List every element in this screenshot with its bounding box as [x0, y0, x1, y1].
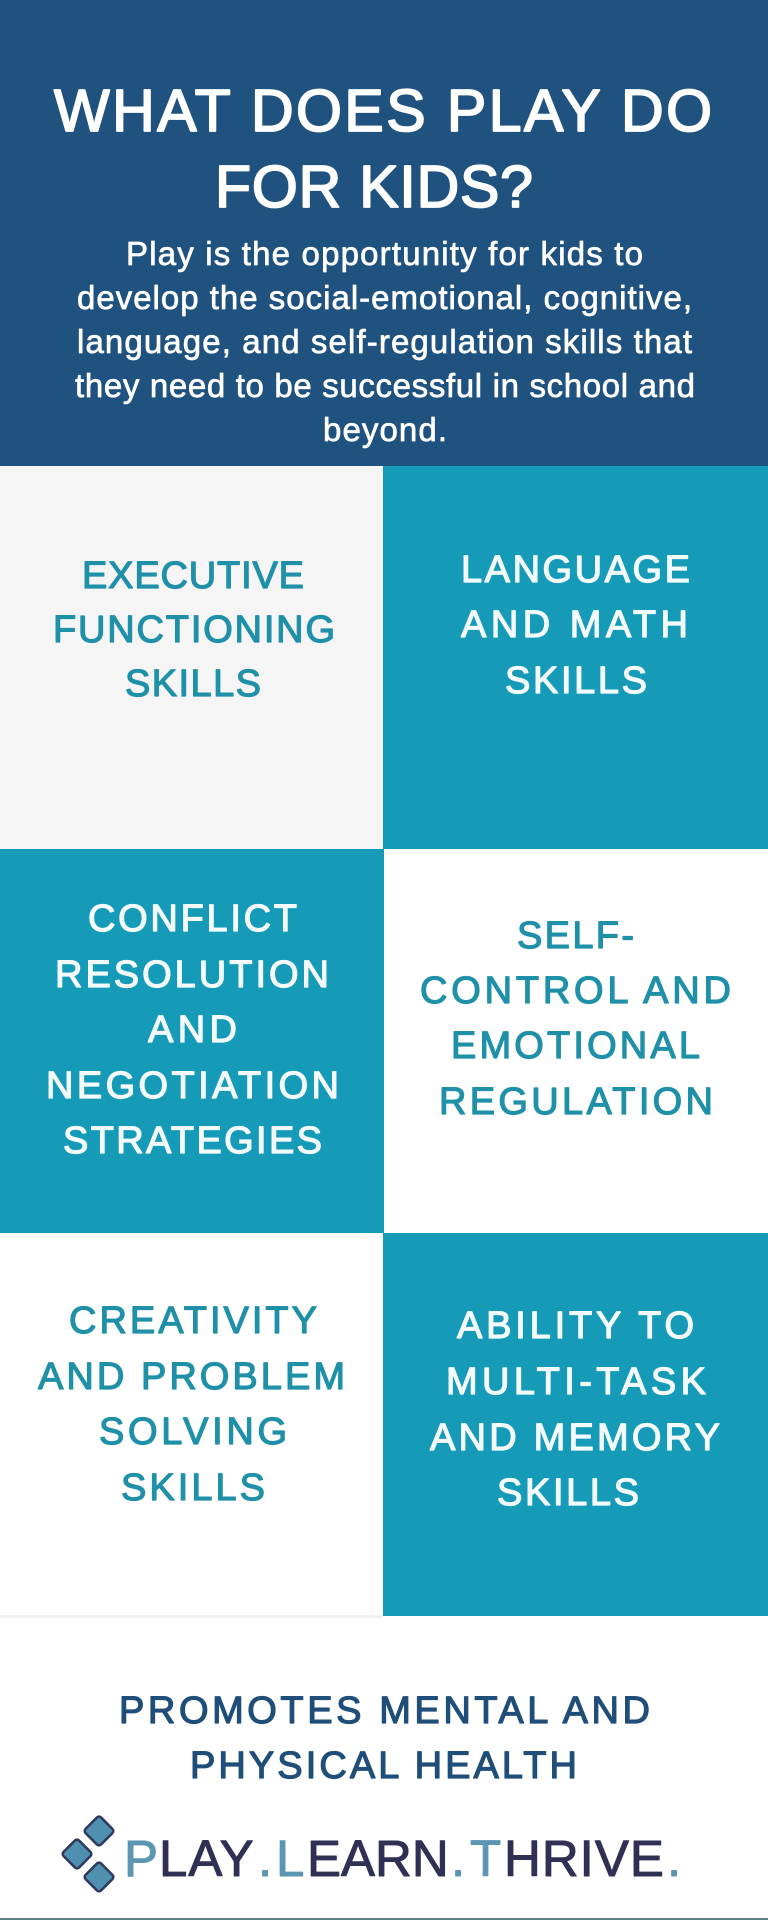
panel: ability to multi-task and memory skills [383, 1233, 768, 1616]
panel: header [0, 0, 768, 466]
intro text: develop the social-emotional, cognitive, [77, 279, 692, 316]
title: WHAT DOES PLAY DO [54, 78, 712, 144]
panel: creativity and problem solving skills [0, 1233, 383, 1616]
panel: executive functioning skills: FUNCTIONING [53, 609, 335, 651]
logo wordmark: LAY [159, 1830, 255, 1887]
icon: three diamonds [61, 1815, 115, 1893]
panel: self-control and emotional regulation: SELF- [517, 915, 634, 957]
intro text: beyond. [323, 411, 447, 448]
panel: ability to multi-task and memory skills: ABILITY TO [457, 1305, 694, 1347]
panel: ability to multi-task and memory skills: MULTI-TASK [446, 1361, 706, 1403]
logo wordmark: P [124, 1830, 158, 1887]
panel: conflict resolution and negotiation strategies: AND [148, 1009, 237, 1051]
panel: conflict resolution and negotiation strategies [0, 849, 384, 1233]
panel: conflict resolution and negotiation strategies: STRATEGIES [63, 1120, 322, 1162]
panel: language and math skills: LANGUAGE [461, 549, 690, 591]
logo wordmark: HRIVE [504, 1830, 665, 1887]
panel: executive functioning skills [0, 466, 383, 849]
panel: conflict resolution and negotiation strategies: NEGOTIATION [46, 1065, 339, 1107]
panel: creativity and problem solving skills: CREATIVITY [69, 1300, 317, 1342]
logo wordmark: L [276, 1830, 304, 1887]
panel: language and math skills [383, 466, 768, 849]
footer heading: PHYSICAL HEALTH [190, 1745, 577, 1787]
panel: conflict resolution and negotiation strategies: RESOLUTION [55, 954, 329, 996]
panel: creativity and problem solving skills: SKILLS [121, 1467, 265, 1509]
panel: self-control and emotional regulation: REGULATION [439, 1081, 713, 1123]
panel: self-control and emotional regulation: CONTROL AND [420, 970, 731, 1012]
panel: self-control and emotional regulation: EMOTIONAL [451, 1025, 700, 1067]
logo wordmark: . [258, 1830, 272, 1887]
panel: ability to multi-task and memory skills: AND MEMORY [430, 1417, 720, 1459]
title: FOR KIDS? [215, 154, 533, 220]
logo wordmark: EARN [307, 1830, 449, 1887]
panel: language and math skills: SKILLS [505, 660, 647, 702]
panel: creativity and problem solving skills: AND PROBLEM [38, 1356, 345, 1398]
panel: self-control and emotional regulation [384, 849, 768, 1233]
intro text [75, 235, 695, 448]
footer heading: PROMOTES MENTAL AND [119, 1690, 650, 1732]
logo wordmark: . [451, 1830, 465, 1887]
intro text: Play is the opportunity for kids to [126, 235, 643, 272]
intro text: they need to be successful in school and [75, 367, 695, 404]
intro text: language, and self-regulation skills that [77, 323, 692, 360]
title [54, 78, 712, 220]
panel: executive functioning skills: SKILLS [125, 663, 261, 705]
panel: conflict resolution and negotiation strategies: CONFLICT [88, 898, 297, 940]
logo [61, 1815, 681, 1893]
panel: ability to multi-task and memory skills: SKILLS [497, 1472, 639, 1514]
logo wordmark: T [470, 1830, 501, 1887]
panel: language and math skills: AND MATH [461, 604, 688, 646]
panel: executive functioning skills: EXECUTIVE [82, 555, 304, 597]
logo wordmark: . [667, 1830, 681, 1887]
footer heading [119, 1690, 650, 1787]
panel: creativity and problem solving skills: SOLVING [99, 1411, 287, 1453]
